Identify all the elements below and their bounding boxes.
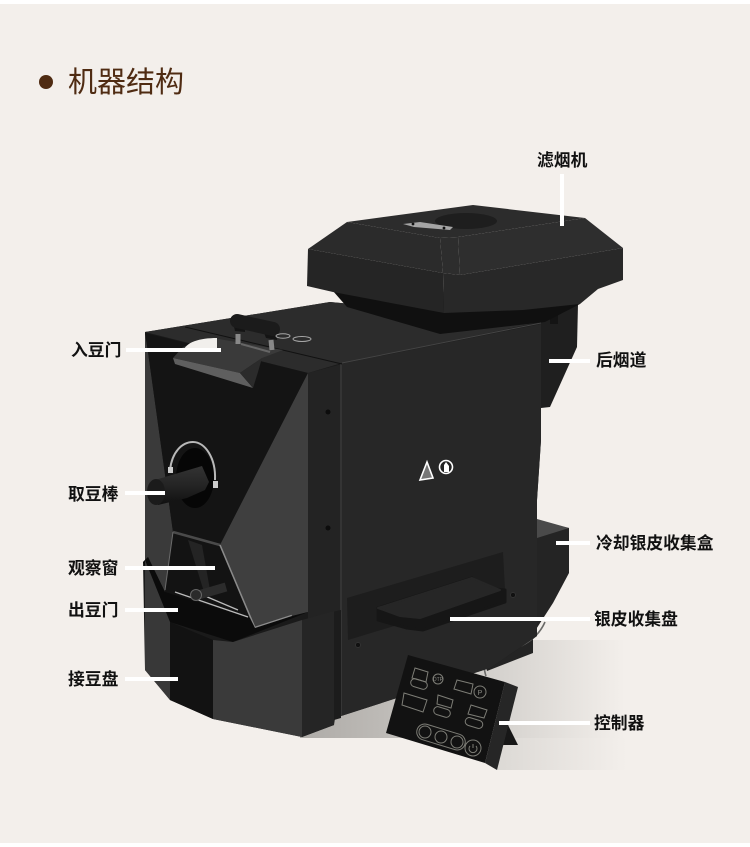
leader line: bean rod [125, 491, 165, 495]
label: cooling chaff box: 冷却银皮收集盒 [596, 534, 713, 553]
controller: P [478, 690, 483, 697]
title text: 机器结构 [68, 67, 184, 99]
cable [478, 622, 545, 676]
smoke filter [307, 205, 623, 334]
corner column [308, 364, 342, 620]
label: smoke filter: 滤烟机 [537, 151, 587, 170]
hopper [173, 338, 283, 388]
label: window: 观察窗 [68, 559, 118, 578]
front right panel [220, 373, 308, 628]
label: controller: 控制器 [594, 714, 644, 733]
bean door flap [143, 557, 308, 642]
leader line: controller [499, 721, 590, 725]
rivets [326, 410, 330, 414]
side panel [335, 324, 541, 718]
label: bean door: 出豆门 [68, 601, 118, 620]
label: bean tray: 接豆盘 [68, 670, 118, 689]
label: bean rod: 取豆棒 [68, 485, 118, 504]
top face [145, 302, 541, 373]
label: chaff tray: 银皮收集盘 [594, 610, 678, 629]
leader line: rear flue [549, 359, 590, 363]
leader line: bean tray [125, 677, 178, 681]
floor shadow [300, 640, 627, 770]
bean tray [145, 560, 170, 700]
window [165, 532, 250, 617]
label: hopper: 入豆门 [71, 341, 121, 360]
rear chimney [538, 304, 578, 408]
bean rod [195, 587, 226, 596]
label: rear flue: 后烟道 [596, 351, 646, 370]
body silhouette [143, 302, 541, 737]
leader line: hopper [126, 348, 221, 352]
main body [143, 302, 541, 737]
controller: DTP [433, 677, 444, 683]
leader line: cooling box [556, 541, 590, 545]
leader line: chaff tray [450, 617, 590, 621]
cooling chaff box [480, 519, 569, 671]
controller [386, 655, 518, 770]
leader line: smoke filter [560, 174, 564, 226]
front left strip [145, 333, 173, 592]
title bullet [39, 75, 53, 89]
leader line: window [125, 566, 215, 570]
warning icons [420, 460, 452, 480]
leader line: bean door [125, 608, 178, 612]
hopper handle [233, 321, 311, 352]
filter vent [435, 213, 497, 229]
title [39, 67, 184, 99]
knob [147, 442, 218, 508]
chaff tray [347, 552, 505, 640]
